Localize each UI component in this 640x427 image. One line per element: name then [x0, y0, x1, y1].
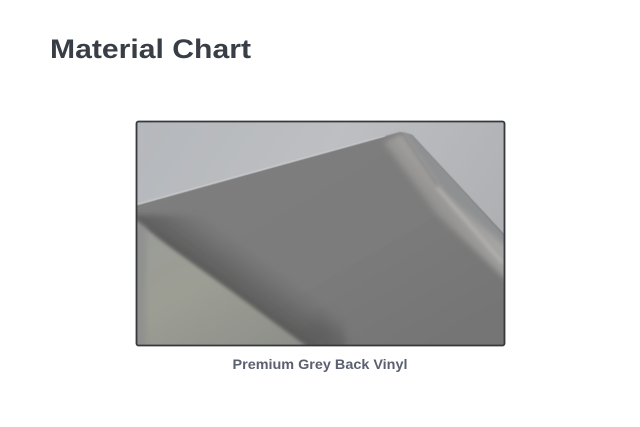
vinyl sheet [137, 132, 504, 345]
wall background [137, 122, 504, 234]
sheet shadow on wall [403, 132, 504, 246]
sheet top edge highlight [137, 136, 385, 204]
curled edge fold [384, 133, 504, 280]
lower-left paper [138, 220, 306, 345]
photo content [137, 122, 504, 345]
caption: Premium Grey Back Vinyl [232, 356, 408, 372]
photo frame [136, 122, 504, 346]
paper left edge shading [138, 226, 144, 344]
page canvas [52, 38, 506, 372]
shadow band along lower paper edge [138, 214, 344, 344]
title: Material Chart [50, 34, 251, 64]
fold highlight [437, 187, 503, 263]
photo: grey back vinyl sample [136, 120, 506, 346]
dark patch at lower sheet corner [290, 315, 350, 345]
